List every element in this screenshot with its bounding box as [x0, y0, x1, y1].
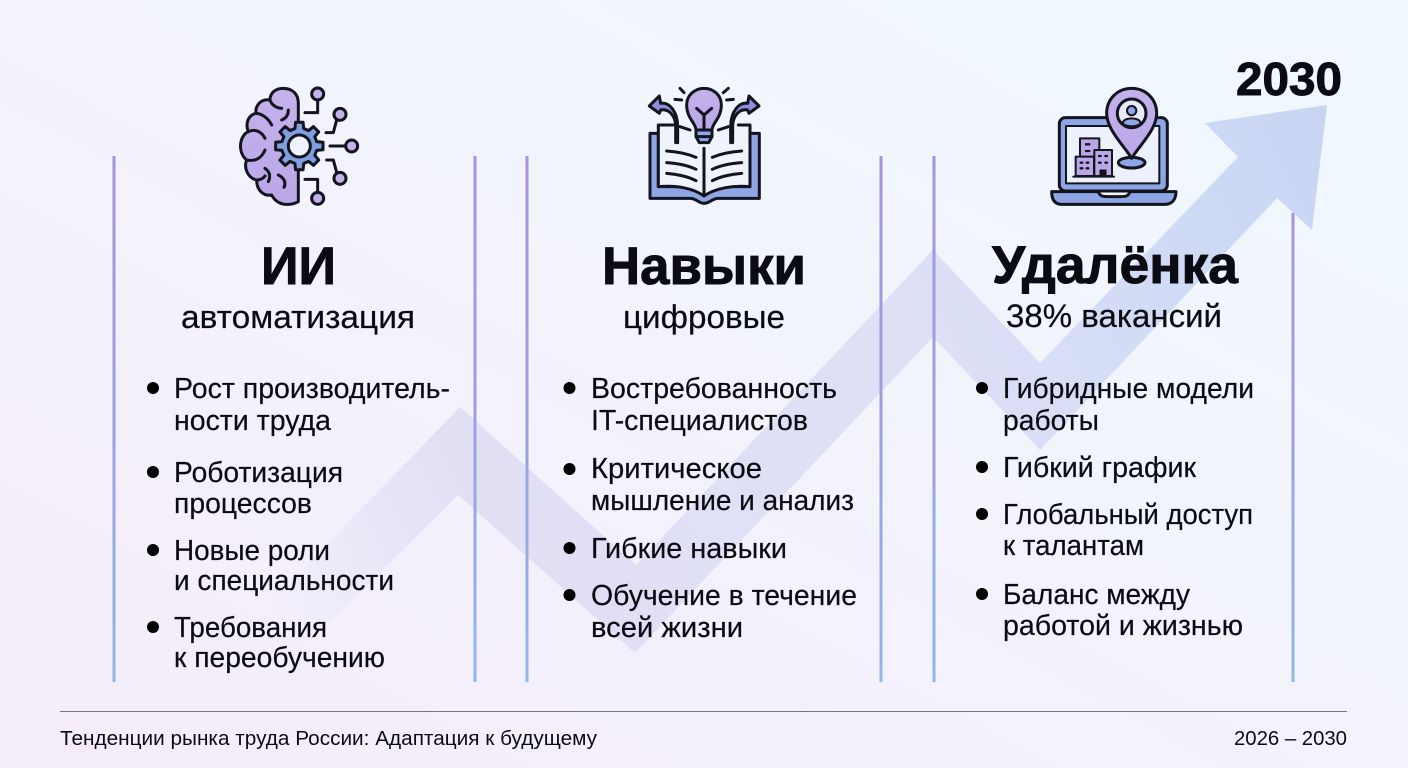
bullet list: AI: Роботизация — [174, 457, 343, 489]
icon: open book with light bulb — [649, 88, 759, 203]
bullet list: AI: процессов — [174, 488, 312, 520]
icon: laptop with location pin — [1052, 88, 1176, 204]
bullet list: AI: к переобучению — [174, 642, 385, 674]
bullet list: remote work: к талантам — [1003, 530, 1144, 562]
bullet list: AI: и специальности — [174, 565, 394, 597]
bullet list: remote work: работой и жизнью — [1003, 610, 1243, 642]
bullet list: remote work: Глобальный доступ — [1003, 499, 1253, 531]
heading: skills: Навыки — [602, 237, 806, 296]
panel: remote work — [976, 88, 1254, 642]
bullet list: skills — [564, 373, 857, 644]
heading: AI: ИИ — [261, 237, 336, 296]
bullet list: AI: ности труда — [174, 405, 331, 437]
panel: AI — [147, 88, 450, 674]
bullet list: skills: Критическое — [591, 453, 762, 485]
footer rule — [60, 711, 1347, 712]
bullet list: skills: мышление и анализ — [591, 485, 854, 517]
footer period: 2026 – 2030 — [1234, 728, 1347, 750]
bullet list: skills: Обучение в течение — [591, 580, 857, 612]
year label: 2030 — [1236, 53, 1342, 105]
bullet list: skills: всей жизни — [591, 612, 743, 644]
bullet list: remote work: работы — [1003, 405, 1099, 437]
bullet list: AI: Требования — [174, 612, 327, 644]
bullet list: skills: Востребованность — [591, 373, 837, 405]
subheading: 38% of vacancies: 38% вакансий — [1006, 298, 1222, 334]
bullet list: remote work — [976, 373, 1254, 642]
column dividers — [112, 156, 1294, 682]
footer title: Тенденции рынка труда России: Адаптация к будущему — [60, 728, 597, 750]
bullet list: skills: Гибкие навыки — [591, 533, 787, 565]
arrow: growth trend to 2030 — [263, 105, 1327, 653]
bullet list: skills: IT-специалистов — [591, 405, 808, 437]
bullet list: remote work: Гибкий график — [1003, 452, 1197, 484]
heading: remote work: Удалёнка — [992, 236, 1239, 295]
bullet list: AI: Рост производитель- — [174, 373, 450, 405]
bullet list: AI: Новые роли — [174, 535, 330, 567]
bullet list: remote work: Гибридные модели — [1003, 373, 1254, 405]
icon: brain with gear — [240, 88, 358, 204]
bullet list: remote work: Баланс между — [1003, 579, 1191, 611]
subheading: digital: цифровые — [623, 299, 785, 335]
bullet list: AI — [147, 373, 450, 674]
subheading: automation: автоматизация — [181, 299, 415, 335]
panel: skills — [564, 88, 857, 644]
